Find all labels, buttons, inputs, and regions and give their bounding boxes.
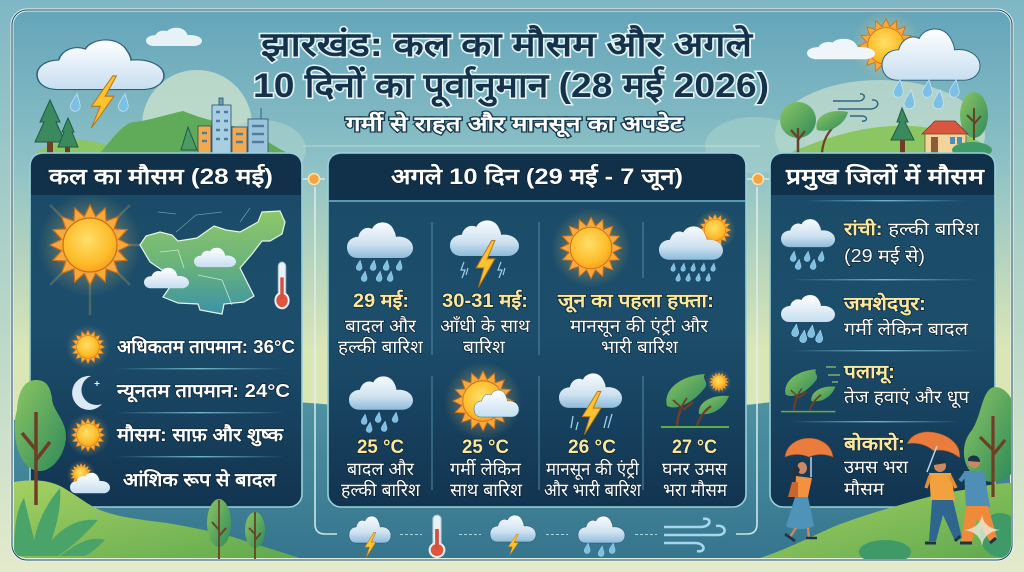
row: condition: मौसम: साफ़ और शुष्क xyxy=(116,424,284,447)
day card: 26 C monsoon: और भारी बारिश xyxy=(544,479,642,500)
icon: storm cloud with lightning xyxy=(37,40,164,128)
icon: trees xyxy=(780,92,988,153)
icon: small cloud xyxy=(146,28,202,46)
day card: 25 C rain: बादल और xyxy=(347,458,415,479)
panel header xyxy=(329,154,745,200)
icon: rain drops xyxy=(893,80,959,109)
title: 10 दिनों का पूर्वानुमान (28 मई 2026) xyxy=(253,65,769,108)
day card: 25 C sun and cloud xyxy=(444,362,523,500)
day card: 29 May: बादल और xyxy=(345,315,417,336)
day card: 27 C humid: 27 °C xyxy=(672,437,717,458)
bottom icon strip xyxy=(349,515,725,558)
district: Bokaro xyxy=(843,432,908,499)
icon: map clouds xyxy=(144,248,236,288)
panel header: अगले 10 दिन (29 मई - 7 जून) xyxy=(391,163,683,191)
subtitle: गर्मी से राहत और मानसून का अपडेट xyxy=(345,111,685,138)
day card: 25 C rain: 25 °C xyxy=(357,437,404,458)
row: max temperature xyxy=(66,325,295,369)
icon: tree xyxy=(964,387,1012,497)
district: Palamu: पलामू: xyxy=(843,362,895,384)
day card: 27 C humid: घनर उमस xyxy=(662,459,728,479)
district: Bokaro: मौसम xyxy=(844,478,885,499)
day card: 29 May: हल्की बारिश xyxy=(338,336,424,357)
row: partly cloudy: आंशिक रूप से बादल xyxy=(123,469,278,490)
panel header: कल का मौसम (28 मई) xyxy=(48,163,273,189)
day card: 30-31 May: आँधी के साथ xyxy=(440,315,531,336)
day card: 26 C monsoon xyxy=(544,373,642,500)
day card: 25 C sun and cloud: गर्मी लेकिन xyxy=(450,458,522,479)
day card: first week of June: जून का पहला हफ्ता: xyxy=(557,291,714,313)
bottom teal ground xyxy=(14,392,1010,558)
day card: 25 C rain xyxy=(341,376,421,500)
day card: 27 C humid: भरा मौसम xyxy=(663,479,728,500)
panel header xyxy=(31,154,301,195)
icon: foreground leaves xyxy=(14,488,105,556)
icon: house xyxy=(922,121,992,158)
illustration: top-right landscape with sun, cloud, house xyxy=(705,11,992,190)
day card: 27 C humid xyxy=(661,370,731,500)
row: partly cloudy xyxy=(67,460,278,493)
illustration: bottom-left hill and trees xyxy=(14,380,300,560)
illustration: bottom-right hill with people and tree xyxy=(760,387,1020,564)
district: Palamu xyxy=(781,362,970,412)
day card: 25 C rain: हल्की बारिश xyxy=(341,479,421,500)
panel header: प्रमुख जिलों में मौसम xyxy=(785,163,985,191)
district: Jamshedpur: गर्मी लेकिन बादल xyxy=(844,318,969,339)
panel: next 10 days xyxy=(328,153,746,507)
title: झारखंड: कल का मौसम और अगले xyxy=(260,24,754,64)
day card: 26 C monsoon: 26 °C xyxy=(568,437,616,458)
district: Jamshedpur xyxy=(781,292,969,343)
icon: big sun xyxy=(38,193,150,315)
day card: 29 May xyxy=(338,222,424,357)
panel: major districts xyxy=(770,153,995,507)
district: Jamshedpur: जमशेदपुर: xyxy=(843,292,926,316)
illustration: top-left landscape with storm cloud and city xyxy=(35,28,306,180)
icon: city buildings xyxy=(198,98,268,153)
icon: wind lines xyxy=(833,94,878,121)
row: max temperature: अधिकतम तापमान: 36°C xyxy=(117,336,295,357)
icon: fir trees xyxy=(35,100,197,153)
icon: tall tree xyxy=(15,380,66,505)
icon: thermometer xyxy=(275,262,289,308)
row: min temperature: न्यूनतम तापमान: 24°C xyxy=(116,380,290,403)
panel: tomorrow's weather xyxy=(30,153,302,507)
icon: small trees xyxy=(207,499,265,560)
map of Jharkhand xyxy=(140,208,285,314)
connectors between panels xyxy=(303,146,769,534)
day card: 25 C sun and cloud: साथ बारिश xyxy=(450,479,523,500)
icon: sun behind cloud xyxy=(807,11,980,81)
day card: 30-31 May: 30-31 मई: xyxy=(442,289,528,312)
day card: 25 C sun and cloud: 25 °C xyxy=(462,437,509,458)
row: condition xyxy=(66,413,284,457)
panel header xyxy=(771,154,994,195)
day card: first week of June xyxy=(551,208,736,357)
day card: first week of June: मानसून की एंट्री और xyxy=(570,315,709,337)
icon: couple with umbrella xyxy=(907,426,997,543)
day card: first week of June: भारी बारिश xyxy=(601,336,679,357)
day card: 30-31 May xyxy=(440,220,531,357)
title xyxy=(253,24,769,108)
day card: 29 May: 29 मई: xyxy=(353,289,409,312)
row: min temperature xyxy=(72,376,290,410)
district: Palamu: तेज हवाएं और धूप xyxy=(844,386,970,408)
district: Bokaro: बोकारो: xyxy=(843,432,905,455)
district: Ranchi: रांची: हल्की बारिश xyxy=(843,218,980,239)
district: Bokaro: उमस भरा xyxy=(844,457,908,477)
day card: 26 C monsoon: मानसून की एंट्री xyxy=(546,458,639,480)
district: Ranchi xyxy=(781,218,980,269)
icon: woman with umbrella xyxy=(785,438,833,541)
district: Ranchi: (29 मई से) xyxy=(844,245,925,266)
day card: 30-31 May: बारिश xyxy=(463,336,506,357)
icon: sparkle mark xyxy=(964,515,1000,546)
